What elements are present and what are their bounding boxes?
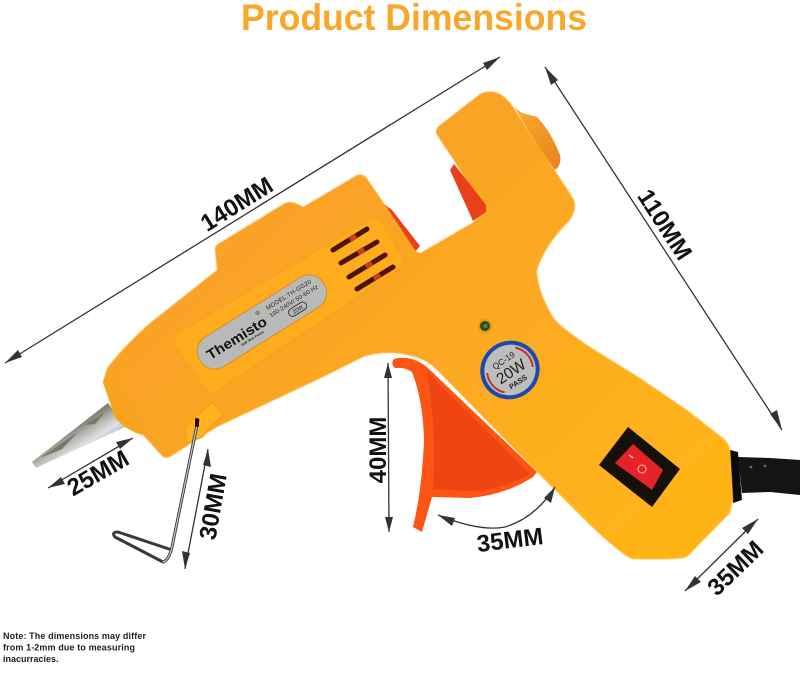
dimension: 35MM trigger arc xyxy=(438,487,555,558)
rear red insert in grip window xyxy=(450,164,486,221)
vent slots xyxy=(333,229,393,289)
dimension: 110MM height xyxy=(545,67,782,430)
dimension: 110MM height: 110MM xyxy=(632,185,697,265)
brand plate: Soft Skin Power xyxy=(240,329,266,347)
wire stand xyxy=(114,420,198,562)
rear red insert xyxy=(384,204,420,252)
note text xyxy=(3,631,146,664)
dimension: 40MM trigger height xyxy=(365,363,393,532)
note text: Note: The dimensions may differ xyxy=(3,631,146,641)
power cord xyxy=(730,450,800,503)
glue gun xyxy=(32,92,800,562)
brand plate: 20W xyxy=(292,304,305,316)
dimension: 35MM grip width: 35MM xyxy=(702,536,769,601)
QC pass badge: PASS xyxy=(507,373,529,391)
dimension: 30MM stand: 30MM xyxy=(195,472,233,542)
dimension: 35MM trigger arc: 35MM xyxy=(475,523,545,558)
trigger xyxy=(392,358,537,532)
side panel recess xyxy=(174,218,403,393)
QC pass badge: 20W xyxy=(493,356,530,388)
dimension: 25MM nozzle: 25MM xyxy=(63,445,134,502)
glue knob xyxy=(515,108,560,170)
nozzle collar shading xyxy=(103,367,146,435)
indicator LED xyxy=(478,319,492,333)
stand clip xyxy=(185,402,223,443)
gun body xyxy=(103,92,733,559)
dimension: 140MM length xyxy=(5,57,500,363)
brand plate: Themisto xyxy=(203,313,270,363)
QC pass badge xyxy=(469,329,551,411)
dimension: 30MM stand xyxy=(182,449,233,569)
brand plate: MODEL:TH-GG20 xyxy=(265,279,313,312)
note text: from 1-2mm due to measuring xyxy=(3,642,135,652)
QC pass badge: QC-19 xyxy=(490,349,517,372)
dimension: 140MM length: 140MM xyxy=(196,172,278,237)
brand plate xyxy=(191,268,333,376)
brand plate: 100-240V/ 50-60 Hz xyxy=(269,284,320,319)
dimension: 35MM grip width xyxy=(685,519,769,601)
brand plate: ® xyxy=(254,309,262,317)
dimension: 40MM trigger height: 40MM xyxy=(365,417,392,483)
note text: inacurracies. xyxy=(3,654,59,664)
metal nozzle tip xyxy=(32,403,125,468)
power switch xyxy=(599,427,680,507)
